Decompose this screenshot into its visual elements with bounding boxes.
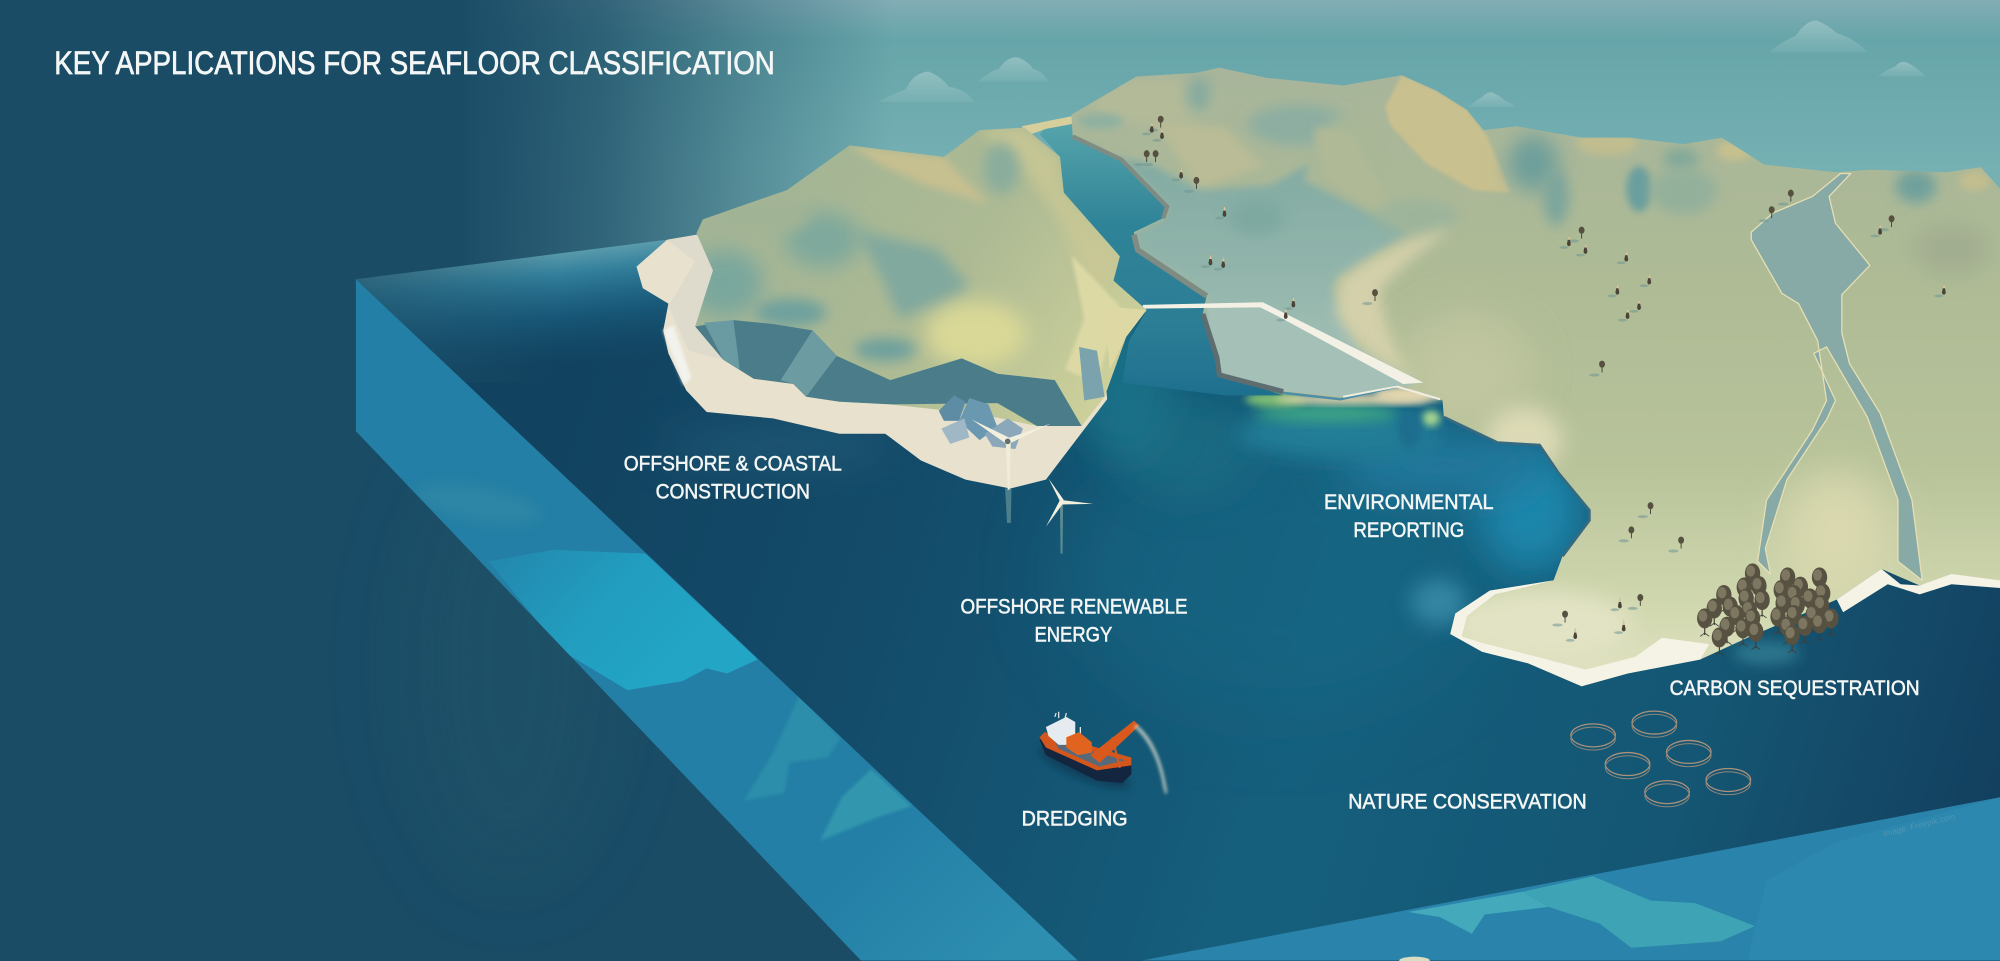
channel water: [1040, 117, 1283, 395]
hull: [1040, 736, 1131, 783]
cliff faces: [695, 320, 1082, 426]
image credit: Image: Freepik.com: [1882, 811, 1956, 839]
front left face of the water block: [356, 279, 1078, 960]
label: offshore and coastal construction: OFFSHORE & COASTAL: [624, 453, 842, 476]
label: offshore and coastal construction: CONSTRUCTION: [656, 481, 810, 504]
label: offshore renewable energy: [960, 596, 1187, 647]
boulders: [939, 395, 1023, 449]
left turbine tower shadow: [1005, 489, 1011, 523]
cloud 4: [1769, 20, 1867, 52]
label: environmental reporting: ENVIRONMENTAL: [1324, 491, 1494, 514]
cloud 1: [878, 71, 974, 102]
island rock: [695, 128, 1147, 426]
label: environmental reporting: REPORTING: [1353, 519, 1464, 542]
label: nature conservation: NATURE CONSERVATION: [1348, 791, 1587, 814]
wind turbine 2: [1046, 478, 1093, 554]
dredging ship: [1035, 712, 1167, 797]
crane: [1092, 722, 1138, 768]
cloud 3: [1468, 92, 1515, 107]
title: KEY APPLICATIONS FOR SEAFLOOR CLASSIFICATION: [54, 45, 775, 81]
scattered trees: [1134, 116, 1946, 642]
label: carbon sequestration: CARBON SEQUESTRATION: [1670, 677, 1920, 700]
sea surface: [356, 230, 2000, 960]
mainland: [1071, 68, 2000, 686]
label: environmental reporting: [1324, 491, 1494, 542]
northern sand spit: [1022, 115, 1080, 135]
road bridge: [1143, 302, 1423, 384]
cream sediment flow: [1337, 227, 1454, 378]
mangrove forest: [1697, 563, 1839, 655]
front right face of the water block: [1142, 797, 2000, 961]
island beach: [636, 235, 1107, 489]
lake and river delta: [1751, 173, 1922, 580]
seabed mound: [1399, 957, 1430, 961]
white bridge: [1046, 717, 1075, 745]
island: [636, 128, 1147, 489]
cloud 2: [977, 57, 1048, 82]
lagoon: [1207, 306, 1413, 397]
label: offshore renewable energy: OFFSHORE RENEWABLE: [960, 596, 1187, 619]
cloud 5: [1878, 62, 1925, 77]
ship shadow: [1035, 739, 1133, 797]
sediment plume: [1134, 725, 1167, 794]
southern beach: [1450, 580, 1709, 686]
mountain shading: [1073, 75, 1990, 393]
label: offshore and coastal construction: [624, 453, 842, 504]
label: offshore renewable energy: ENERGY: [1034, 624, 1112, 647]
wind turbine 1: [972, 420, 1051, 490]
deck: [1054, 740, 1125, 767]
aquaculture rings: [1571, 711, 1751, 807]
orange container: [1066, 732, 1092, 755]
label: dredging: DREDGING: [1022, 807, 1128, 830]
river-bank cliffs: [1073, 136, 1167, 218]
